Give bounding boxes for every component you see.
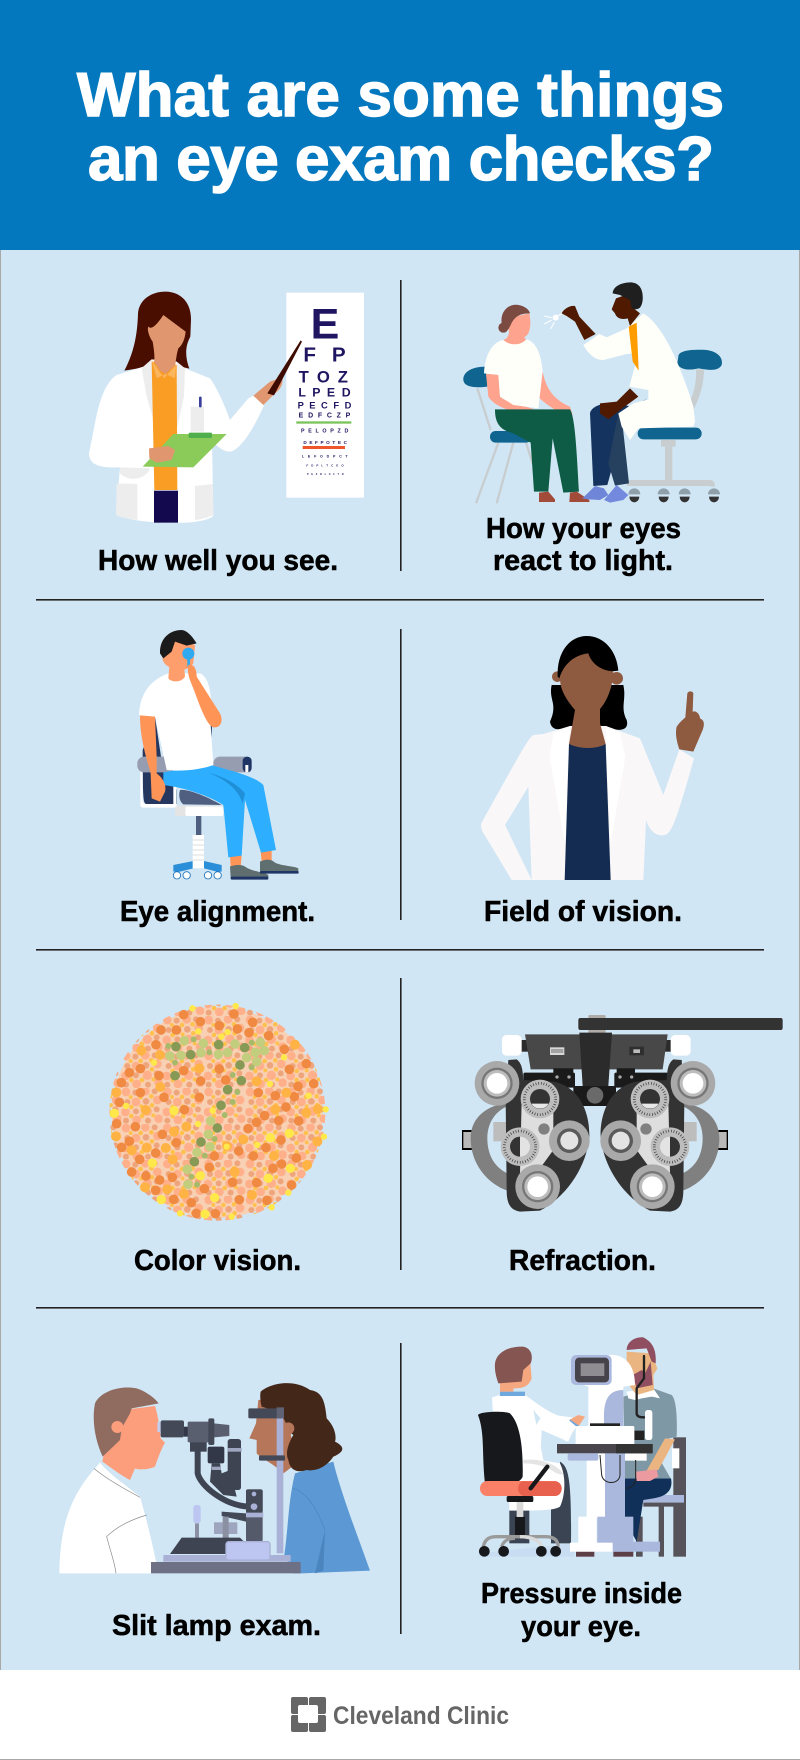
eye chart: F D P L T C E O <box>306 463 344 467</box>
eye chart: E D F C Z P <box>299 413 351 420</box>
label: Refraction. <box>509 1245 656 1277</box>
eye chart: L E F O D P C T <box>302 454 348 458</box>
panel: how your eyes react to light <box>463 282 722 577</box>
panel: slit lamp exam <box>59 1383 370 1642</box>
eye chart: F P <box>303 344 346 367</box>
eye chart: P E C F D <box>298 401 352 411</box>
illustration: doctor pointing finger up <box>481 636 704 880</box>
label <box>486 513 681 577</box>
title <box>77 61 724 194</box>
label: react to light. <box>493 545 673 577</box>
panel: refraction <box>462 1015 783 1277</box>
label: How well you see. <box>98 545 338 577</box>
panel: color vision <box>109 1005 326 1277</box>
label: How your eyes <box>486 513 681 545</box>
illustration: man in chair covering one eye <box>137 630 299 880</box>
lens assembly: right <box>600 1059 728 1212</box>
title: What are some things <box>77 61 724 130</box>
eye chart: P E Z O L C F T D <box>307 472 344 476</box>
logo: Cleveland Clinic <box>291 1697 509 1732</box>
label <box>481 1578 682 1643</box>
illustration: slit lamp with doctor and patient <box>59 1383 370 1573</box>
penlight <box>544 313 563 329</box>
label: Slit lamp exam. <box>112 1610 321 1642</box>
label: Color vision. <box>134 1245 301 1277</box>
lens assembly: left <box>462 1059 590 1212</box>
panel: eye alignment <box>120 630 315 928</box>
footer <box>0 1670 800 1760</box>
label: Field of vision. <box>484 896 682 928</box>
header banner <box>0 0 800 250</box>
illustration: patient and doctor with penlight <box>463 282 722 503</box>
eye chart <box>286 293 364 498</box>
label: Eye alignment. <box>120 896 315 928</box>
panel: how well you see <box>89 292 364 577</box>
illustration: doctor with pointer <box>89 292 364 523</box>
logo: Cleveland Clinic: Cleveland Clinic <box>333 1702 509 1730</box>
illustration: phoropter <box>462 1015 783 1212</box>
illustration: tonometry exam <box>478 1337 686 1557</box>
eye chart: L P E D <box>298 386 351 400</box>
panel: pressure inside your eye <box>478 1337 686 1643</box>
eye chart: D E F P O T E C <box>303 440 348 445</box>
panel: field of vision <box>481 636 704 928</box>
eye chart: P E L O P Z D <box>301 429 348 435</box>
eye chart: T O Z <box>299 367 348 386</box>
label: Pressure inside <box>481 1578 682 1610</box>
title: an eye exam checks? <box>88 125 714 194</box>
illustration: color blindness test plate <box>109 1005 326 1221</box>
label: your eye. <box>521 1611 641 1643</box>
eye chart: E <box>311 301 339 349</box>
logo mark <box>291 1697 326 1732</box>
pointer <box>267 340 302 395</box>
